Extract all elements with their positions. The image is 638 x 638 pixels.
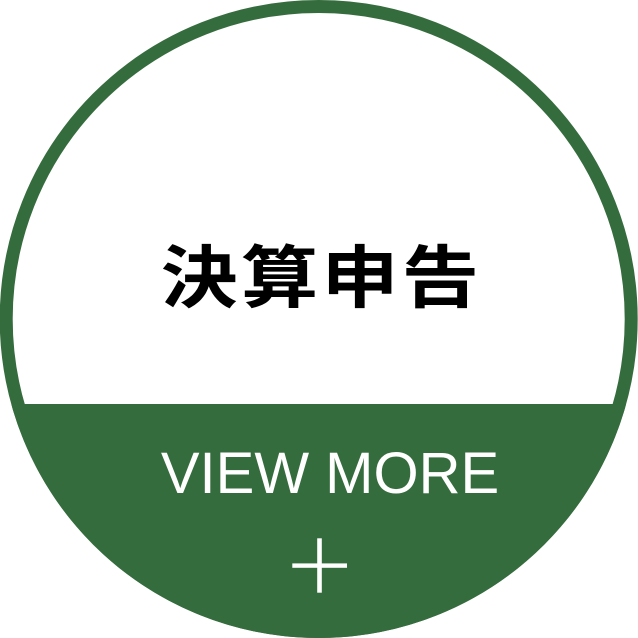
label: view more: VIEW MORE [161, 441, 499, 506]
panel: green lower band [0, 404, 638, 638]
title: 決算申告 [161, 241, 482, 317]
icon: plus [292, 538, 347, 593]
